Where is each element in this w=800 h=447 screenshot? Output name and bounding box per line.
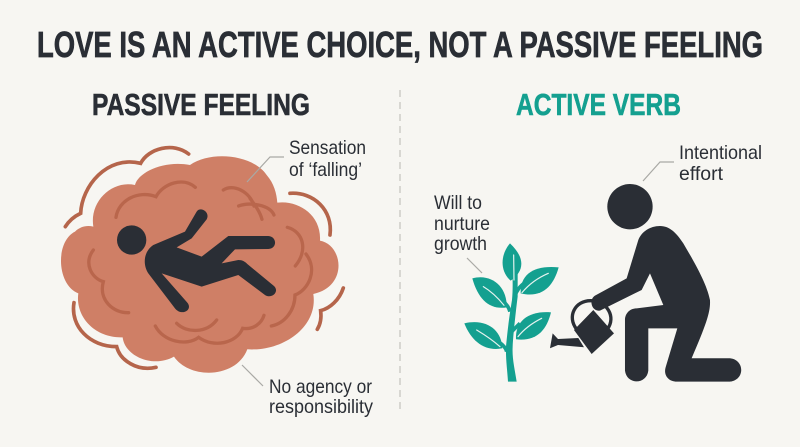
leader line: no agency [242, 365, 263, 386]
cloud inner swirls [89, 182, 312, 343]
icon: kneeling figure [591, 184, 741, 382]
label: no agency: No agency or [269, 376, 372, 398]
icon: falling figure [117, 209, 276, 312]
label: intentional effort: effort [679, 163, 724, 185]
label: intentional effort: Intentional [679, 142, 762, 164]
label: sensation of falling [289, 137, 366, 181]
panel: passive feeling [61, 137, 373, 418]
leader line: intentional effort [643, 162, 674, 181]
label: will to nurture growth [434, 192, 490, 255]
leader line: will to nurture [467, 258, 482, 273]
leader line: sensation [247, 157, 284, 182]
heading: passive feeling: PASSIVE FEELING [92, 87, 310, 122]
label: will to nurture growth: growth [434, 233, 487, 255]
label: sensation of falling: of ‘falling’ [289, 159, 362, 181]
label: will to nurture growth: nurture [434, 213, 490, 235]
label: sensation of falling: Sensation [289, 137, 366, 159]
panel: active verb [434, 142, 762, 382]
illustration: cloud with falling figure [61, 148, 343, 373]
heading: active verb: ACTIVE VERB [516, 87, 681, 122]
label: will to nurture growth: Will to [434, 192, 482, 214]
label: no agency: responsibility [269, 396, 373, 418]
illustration: plant and kneeling figure [464, 184, 741, 382]
motion lines around cloud [65, 148, 343, 368]
icon: plant [464, 243, 559, 382]
icon: swirling cloud [61, 156, 339, 373]
icon: watering can [550, 301, 614, 354]
label: no agency [269, 376, 373, 418]
label: intentional effort [679, 142, 762, 185]
